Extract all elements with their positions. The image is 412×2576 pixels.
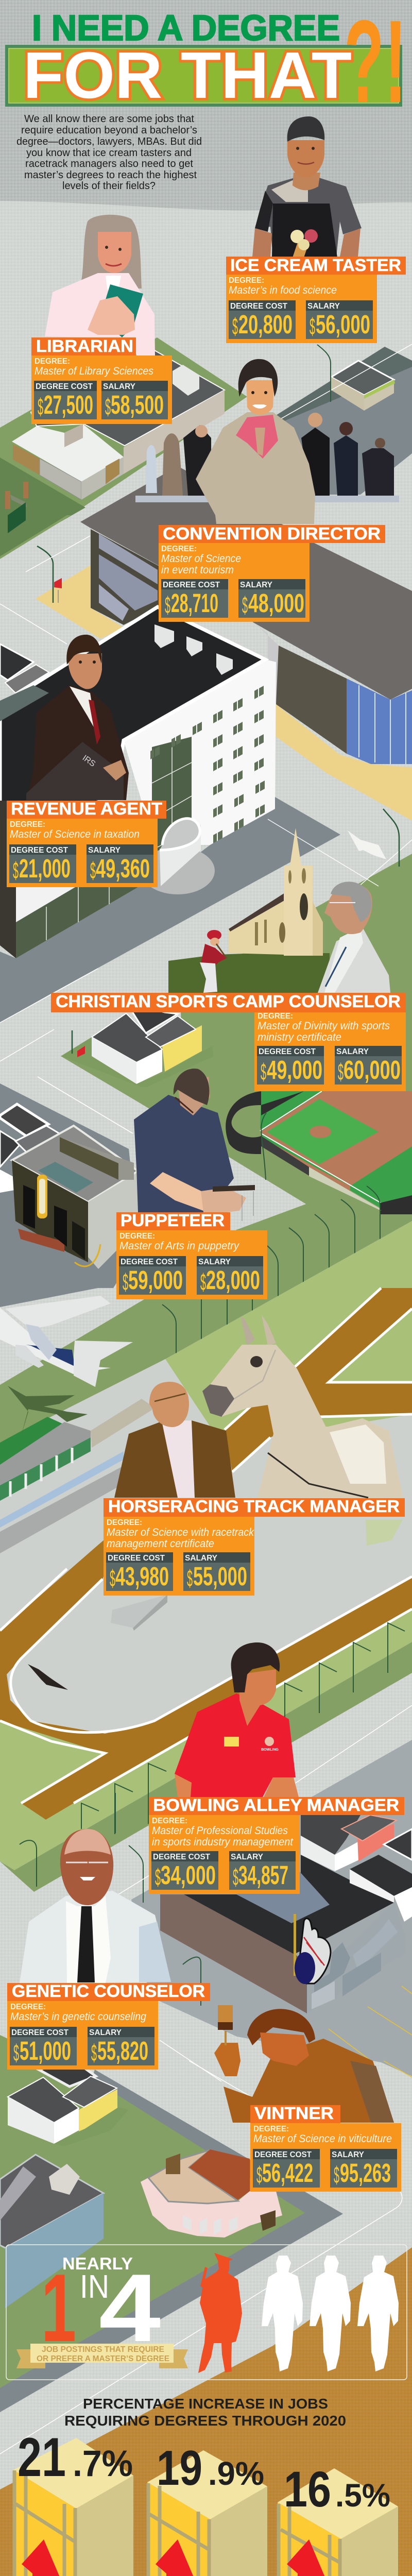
card: ice cream taster: ICE CREAM TASTER <box>230 256 401 275</box>
card: ice cream taster <box>226 256 406 343</box>
icon: white silhouette 2 <box>310 2256 351 2371</box>
intro text: levels of their fields? <box>62 180 156 192</box>
person: camp counselor <box>318 882 390 993</box>
intro text: We all know there are some jobs that <box>24 113 194 125</box>
map: street lamps along green <box>162 1186 380 1362</box>
card: vintner <box>250 2104 401 2192</box>
person: bowling alley manager: BOWLING <box>261 1748 279 1752</box>
map: library block <box>0 337 247 559</box>
person: convention director <box>196 359 315 524</box>
card: horseracing track manager: $ <box>187 1565 193 1591</box>
title: I need a degree: I NEED A DEGREE <box>32 8 340 48</box>
card: convention director: Master of Science <box>161 553 241 565</box>
card: librarian: 58,500 <box>111 390 164 419</box>
card: revenue agent: Master of Science in taxation <box>10 828 140 840</box>
person: vintner <box>214 2005 394 2123</box>
card: bowling alley manager: 34,857 <box>238 1860 288 1890</box>
card: horseracing track manager: 55,000 <box>193 1562 247 1591</box>
icon: eagle <box>28 1664 68 1690</box>
card: bowling alley manager: $ <box>233 1864 238 1890</box>
card: convention director: DEGREE COST <box>163 581 220 589</box>
person: ice cream taster <box>252 116 362 258</box>
map: theatre <box>0 1083 139 1307</box>
card: ice cream taster: DEGREE: <box>229 276 264 285</box>
person: baseball boy <box>200 930 227 993</box>
card: librarian: $ <box>38 394 43 420</box>
heading: percentage increase in jobs: REQUIRING DEGREES THROUGH 2020 <box>64 2413 346 2429</box>
card: vintner: SALARY <box>332 2150 364 2159</box>
map: church <box>168 828 330 993</box>
chart: doctorate block: 19 <box>157 2441 202 2496</box>
card: vintner: DEGREE: <box>253 2125 289 2133</box>
card: convention director: 48,000 <box>248 588 304 618</box>
card: vintner: 56,422 <box>262 2158 313 2188</box>
chart: doctorate block <box>147 2441 304 2576</box>
decorative rail: balcony <box>135 496 399 502</box>
panel: nearly 1 in 4 <box>6 2245 407 2380</box>
card: revenue agent: DEGREE: <box>10 820 45 829</box>
people: convention crowd <box>146 413 394 496</box>
card: convention director <box>159 524 385 622</box>
intro text: you know that ice cream tasters and <box>26 147 192 159</box>
card: puppeteer: Master of Arts in puppetry <box>119 1240 239 1252</box>
card: librarian: DEGREE: <box>35 357 70 366</box>
card: vintner: $ <box>256 2162 262 2188</box>
card: christian sports camp counselor: SALARY <box>336 1047 369 1056</box>
card: horseracing track manager: Master of Science with racetrack <box>107 1527 254 1538</box>
card: horseracing track manager: $ <box>110 1565 115 1591</box>
ribbon: job postings <box>16 2344 188 2368</box>
card: horseracing track manager: 43,980 <box>115 1562 169 1591</box>
card: vintner: $ <box>334 2162 339 2188</box>
map: white office building <box>0 607 276 876</box>
card: bowling alley manager: BOWLING ALLEY MANAGER <box>153 1795 399 1815</box>
map: checker lot by puppeteer <box>38 1077 306 1230</box>
card: ice cream taster: 56,000 <box>316 310 370 339</box>
chart: doctorate block: .9% <box>208 2455 264 2492</box>
icon: bowling pins and ball <box>294 1914 331 1984</box>
card: christian sports camp counselor: Master of Divinity with sports <box>258 1020 390 1032</box>
stat: nearly 1 in 4: IN <box>80 2268 109 2305</box>
card: librarian <box>31 336 172 424</box>
card: christian sports camp counselor: DEGREE COST <box>259 1047 316 1056</box>
card: vintner: Master of Science in viticulture <box>253 2133 392 2145</box>
icon: airplane and shadow <box>0 1296 133 1437</box>
intro text: master’s degrees to reach the highest <box>24 170 197 181</box>
card: convention director: 28,710 <box>171 588 218 618</box>
intro text <box>16 113 202 192</box>
person: genetic counselor <box>20 1829 171 1983</box>
card: horseracing track manager: SALARY <box>185 1554 217 1563</box>
card: puppeteer: $ <box>123 1269 128 1295</box>
card: genetic counselor: SALARY <box>89 2028 122 2037</box>
card: christian sports camp counselor: $ <box>338 1059 344 1085</box>
card: convention director: $ <box>242 592 248 618</box>
card: bowling alley manager: SALARY <box>231 1853 263 1861</box>
card: revenue agent: 49,360 <box>96 854 150 883</box>
card: puppeteer <box>116 1211 267 1299</box>
chart: bachelor's block <box>278 2461 412 2576</box>
card: genetic counselor: 55,820 <box>97 2036 148 2065</box>
card: bowling alley manager: $ <box>155 1864 161 1890</box>
card: christian sports camp counselor: ministry certificate <box>258 1031 341 1043</box>
card: revenue agent: $ <box>13 857 19 884</box>
card: revenue agent: $ <box>90 857 96 884</box>
card: bowling alley manager: 34,000 <box>161 1860 216 1890</box>
icon: white silhouette 1 <box>262 2256 303 2371</box>
card: ice cream taster: $ <box>310 313 315 340</box>
card: puppeteer: SALARY <box>198 1258 231 1266</box>
card: bowling alley manager: DEGREE COST <box>153 1853 210 1861</box>
card: christian sports camp counselor <box>51 992 406 1091</box>
card: librarian: 27,500 <box>44 390 93 419</box>
person: bowling alley manager <box>175 1642 299 1797</box>
person: librarian <box>45 215 155 355</box>
card: ice cream taster: $ <box>232 313 238 340</box>
person: revenue agent <box>26 635 129 800</box>
stat: nearly 1 in 4: 4 <box>99 2254 161 2362</box>
card: revenue agent: DEGREE COST <box>11 846 68 855</box>
map: house with yellow wing <box>0 969 214 1133</box>
icon: white silhouette 3 <box>357 2256 399 2371</box>
card: librarian: SALARY <box>103 382 135 391</box>
card: puppeteer: 28,000 <box>206 1265 260 1295</box>
card: convention director: DEGREE: <box>161 545 197 553</box>
card: convention director: SALARY <box>240 581 272 589</box>
card: horseracing track manager: DEGREE: <box>107 1518 142 1527</box>
map: road and small shop <box>274 344 412 495</box>
card: horseracing track manager: DEGREE COST <box>108 1554 165 1563</box>
card: genetic counselor: DEGREE: <box>10 2003 46 2011</box>
card: puppeteer: $ <box>200 1269 206 1295</box>
chart: master's degrees block <box>13 2426 170 2576</box>
intro text: racetrack managers also need to get <box>25 158 193 170</box>
card: convention director: $ <box>165 592 170 618</box>
card: bowling alley manager: Master of Professional Studies <box>152 1825 288 1837</box>
card: genetic counselor: DEGREE COST <box>11 2028 68 2037</box>
card: bowling alley manager: in sports industry management <box>152 1836 294 1848</box>
person: revenue agent: IRS <box>81 754 97 769</box>
person: track manager <box>114 1382 235 1498</box>
ribbon: job postings: OR PREFER A MASTER’S DEGREE <box>37 2354 169 2363</box>
card: bowling alley manager: DEGREE: <box>152 1817 187 1825</box>
map: racetrack <box>0 1221 412 1892</box>
card: ice cream taster: SALARY <box>307 302 340 311</box>
icon: graduate silhouette <box>198 2253 242 2373</box>
map: bowling alley road and building <box>131 1705 412 2076</box>
map: road with church block <box>0 797 412 1443</box>
card: ice cream taster: Master’s in food science <box>229 284 337 296</box>
card: genetic counselor: $ <box>13 2040 19 2066</box>
map: parking lines <box>20 1623 412 2081</box>
animal: horse <box>202 1315 403 1498</box>
card: genetic counselor: Master’s in genetic counseling <box>10 2011 146 2023</box>
heading: percentage increase in jobs <box>64 2396 346 2429</box>
person: puppeteer <box>134 1069 255 1221</box>
card: convention director: CONVENTION DIRECTOR <box>163 524 381 543</box>
chart: master's degrees block: 21 <box>18 2426 66 2488</box>
card: puppeteer: DEGREE COST <box>121 1258 178 1266</box>
card: puppeteer: DEGREE: <box>119 1232 155 1241</box>
card: librarian: DEGREE COST <box>36 382 93 391</box>
stat: nearly 1 in 4: NEARLY <box>62 2254 133 2273</box>
title punctuation: question and exclamation mark: ? <box>344 0 384 127</box>
card: revenue agent: REVENUE AGENT <box>11 799 162 818</box>
ribbon: job postings: JOB POSTINGS THAT REQUIRE <box>42 2345 164 2354</box>
card: revenue agent: 21,000 <box>19 854 71 883</box>
card: puppeteer: PUPPETEER <box>121 1211 225 1230</box>
intro text: require education beyond a bachelor’s <box>21 125 197 136</box>
card: vintner: VINTNER <box>254 2104 334 2123</box>
card: revenue agent <box>7 799 166 887</box>
card: convention director: in event tourism <box>161 564 234 576</box>
card: christian sports camp counselor: 49,000 <box>267 1055 322 1084</box>
card: ice cream taster: 20,800 <box>238 310 293 339</box>
card: librarian: LIBRARIAN <box>36 336 133 355</box>
title punctuation: question and exclamation mark <box>344 0 407 127</box>
map: baseball stadium <box>226 1091 412 1214</box>
card: genetic counselor: 51,000 <box>20 2036 71 2065</box>
stat: nearly 1 in 4 <box>41 2254 161 2362</box>
map: grandstand <box>0 1399 155 1553</box>
card: bowling alley manager <box>149 1795 404 1894</box>
card: christian sports camp counselor: DEGREE: <box>258 1012 293 1021</box>
card: horseracing track manager: management certificate <box>107 1538 214 1550</box>
stat: nearly 1 in 4: 1 <box>41 2254 76 2362</box>
card: librarian: $ <box>105 394 111 420</box>
card: vintner: DEGREE COST <box>254 2150 312 2159</box>
map: lower neighbourhood <box>0 2035 402 2454</box>
title banner: for that: FOR THAT <box>23 39 352 112</box>
chart: bachelor's block: 16 <box>284 2461 331 2517</box>
card: christian sports camp counselor: $ <box>261 1059 266 1085</box>
card: genetic counselor: GENETIC COUNSELOR <box>12 1981 205 2001</box>
heading: percentage increase in jobs: PERCENTAGE INCREASE IN JOBS <box>83 2396 328 2412</box>
card: horseracing track manager: HORSERACING TRACK MANAGER <box>108 1497 400 1516</box>
title punctuation: question and exclamation mark: ! <box>384 0 407 127</box>
intro text: degree—doctors, lawyers, MBAs. But did <box>16 136 202 147</box>
map: brown ground <box>0 2247 412 2576</box>
card: genetic counselor <box>7 1981 210 2070</box>
card: librarian: Master of Library Sciences <box>35 365 153 377</box>
chart: bachelor's block: .5% <box>335 2478 390 2514</box>
card: christian sports camp counselor: CHRISTIAN SPORTS CAMP COUNSELOR <box>56 992 401 1011</box>
card: puppeteer: 59,000 <box>128 1265 183 1295</box>
map: convention centre <box>0 466 412 821</box>
card: genetic counselor: $ <box>91 2040 97 2066</box>
card: revenue agent: SALARY <box>88 846 121 855</box>
card: ice cream taster: DEGREE COST <box>230 302 287 311</box>
card: horseracing track manager <box>104 1497 405 1596</box>
chart: master's degrees block: .7% <box>73 2444 133 2484</box>
